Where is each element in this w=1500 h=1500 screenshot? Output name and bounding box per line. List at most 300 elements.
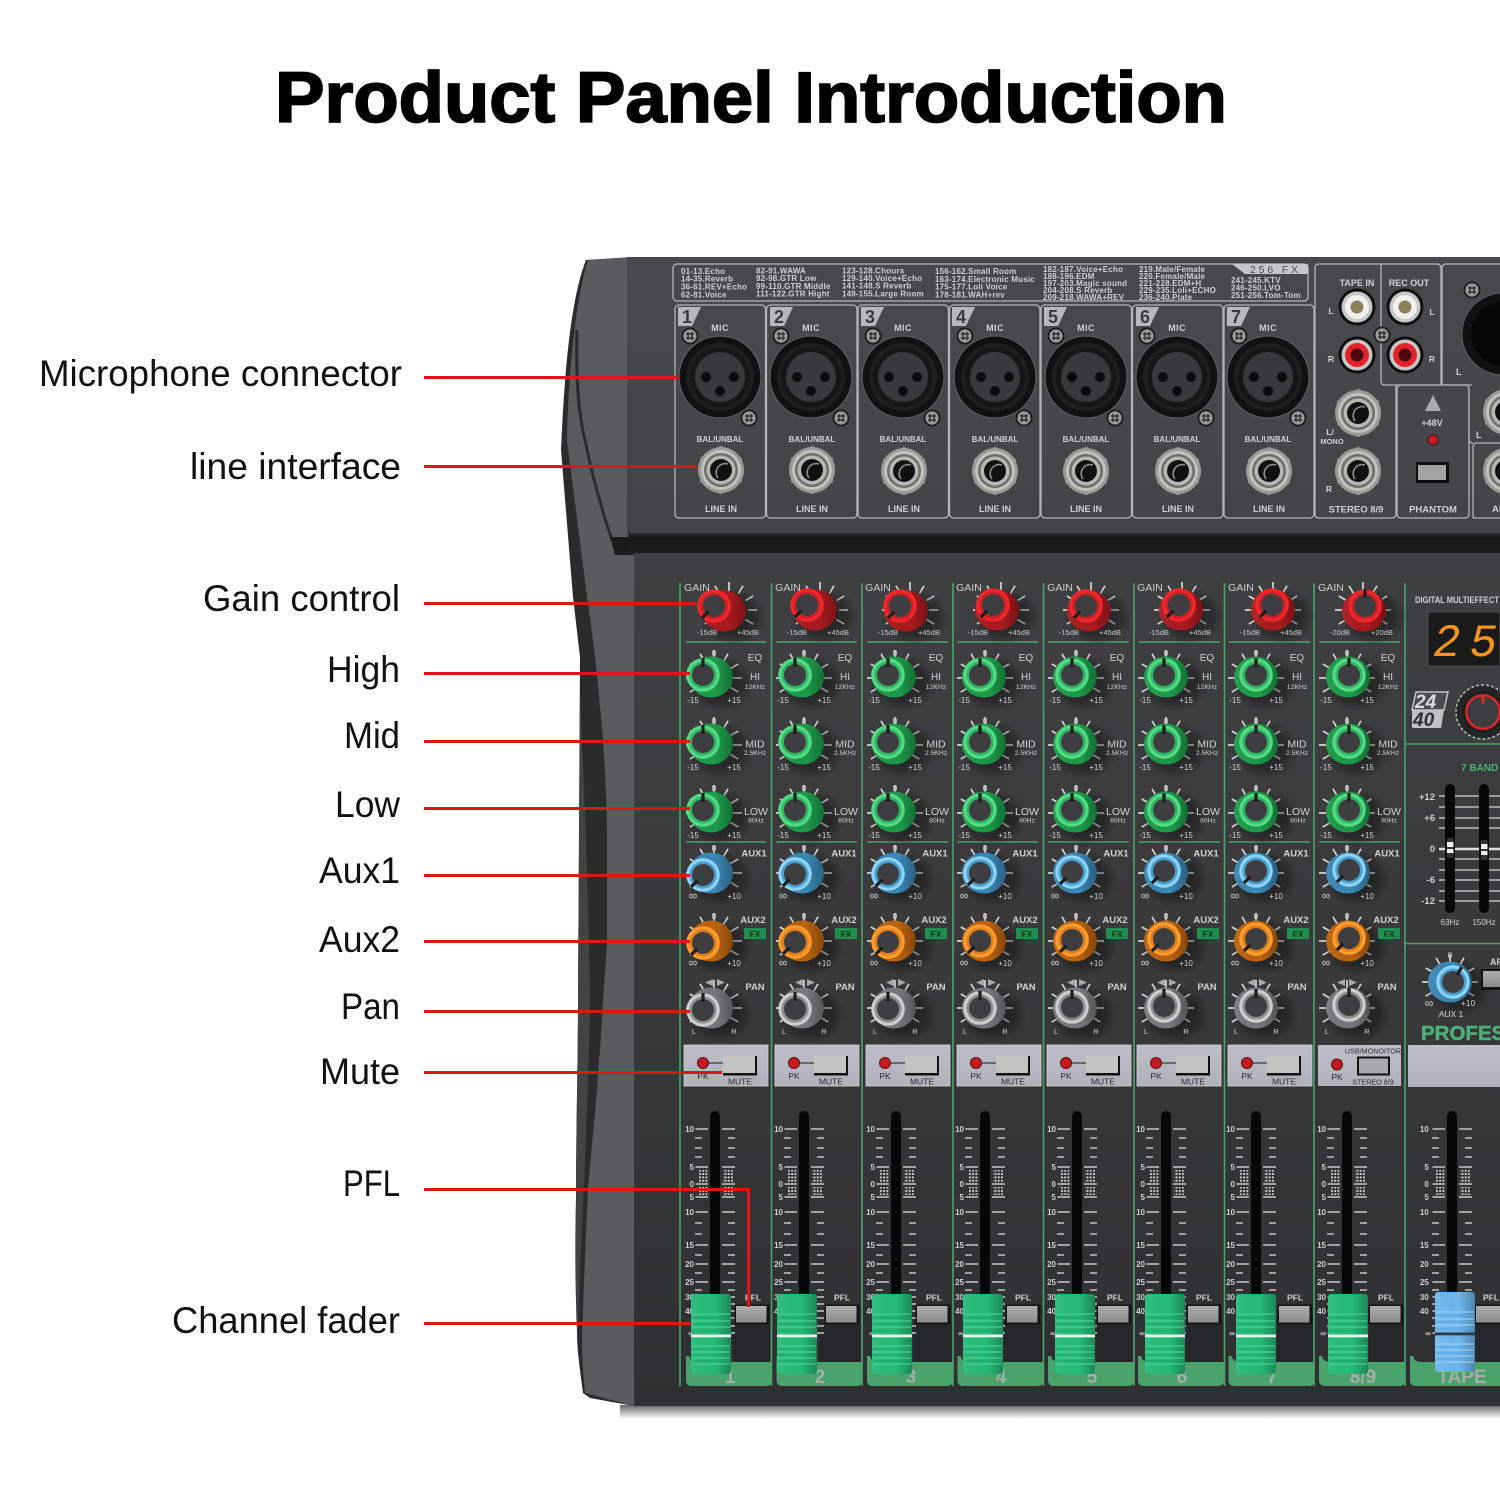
- fader bottom trays: 4: [996, 1367, 1007, 1388]
- fader scale numbers: 5: [1141, 1193, 1146, 1202]
- PAN labels: PAN: [1197, 982, 1217, 993]
- LOW EQ labels: 0: [1074, 783, 1079, 793]
- AUX2 labels and FX badges: ∞: [1141, 956, 1149, 970]
- gain labels: +45dB: [1189, 628, 1211, 637]
- fader bottom trays: 3: [906, 1367, 916, 1388]
- fader scale numbers: 10: [1420, 1208, 1429, 1217]
- AUX2 labels and FX badges: AUX2: [740, 915, 766, 926]
- MID EQ labels: 0: [1164, 716, 1169, 726]
- MIC labels: MIC: [1168, 323, 1186, 333]
- AUX1 labels: AUX1: [1283, 848, 1309, 860]
- HI EQ labels: -15: [1139, 696, 1151, 705]
- MID EQ labels: +15: [817, 763, 831, 772]
- HI EQ labels: 12KHz: [1287, 684, 1308, 691]
- input channel boxes 1-7: 1: [682, 307, 692, 327]
- callout: Low: Low: [335, 784, 400, 825]
- fader scale numbers: 25: [866, 1278, 876, 1287]
- PAN labels: PAN: [1016, 982, 1036, 993]
- fader bottom trays: 1: [725, 1367, 736, 1388]
- gain labels: -15dB: [1149, 628, 1169, 637]
- fader scale numbers: 40: [685, 1307, 695, 1316]
- LOW EQ labels: +15: [998, 831, 1012, 840]
- AUX1 labels: ∞: [1141, 888, 1149, 902]
- fader bottom trays: 6: [1177, 1367, 1187, 1388]
- MID EQ labels: 2.5KHz: [834, 750, 857, 757]
- dark recess beside faders: [733, 1322, 1500, 1362]
- LOW EQ labels: -15: [958, 831, 970, 840]
- 7 band stereo EQ: +12: [1419, 792, 1435, 803]
- LOW EQ labels: LOW: [1196, 806, 1220, 818]
- LOW EQ labels: -15: [1049, 831, 1061, 840]
- mute and PK blocks: PK: [1150, 1071, 1162, 1081]
- AUX2 labels and FX badges: ∞: [1051, 956, 1059, 970]
- AUX1 labels: ∞: [689, 888, 697, 902]
- front lip shadow band: [628, 533, 1500, 553]
- LOW EQ labels: 0: [1164, 783, 1169, 793]
- LOW EQ labels: LOW: [834, 806, 858, 818]
- fader scale numbers: ∞: [777, 1329, 783, 1338]
- AUX2 labels and FX badges: ∞: [870, 956, 878, 970]
- HI EQ labels: HI: [1202, 672, 1212, 683]
- mute and PK blocks: PK: [1241, 1071, 1253, 1081]
- AUX2 labels and FX badges: +10: [1179, 959, 1193, 968]
- AUX1 labels: +10: [1269, 892, 1283, 901]
- fader scale numbers: 5: [779, 1193, 784, 1202]
- input channel boxes 1-7: 4: [956, 307, 966, 327]
- fader scale numbers: 5: [960, 1193, 965, 1202]
- 24 bit 40 kHz badge: 24: [1414, 692, 1437, 713]
- AUX2 labels and FX badges: FX: [841, 929, 852, 939]
- MID EQ labels: +15: [998, 763, 1012, 772]
- AUX2 labels and FX badges: AUX2: [1193, 915, 1219, 926]
- 24 bit 40 kHz badge: 40: [1412, 710, 1435, 731]
- callout: Aux1: Aux1: [319, 850, 400, 891]
- MID EQ labels: MID: [1107, 738, 1127, 750]
- fader scale numbers: 30: [1047, 1293, 1057, 1302]
- AUX2 labels and FX badges: 0: [1164, 911, 1169, 921]
- stereo and RCA section: [1315, 264, 1441, 518]
- MID EQ labels: 0: [802, 716, 807, 726]
- fader scale numbers: ∞: [688, 1329, 694, 1338]
- AUX1 labels: +10: [1360, 892, 1374, 901]
- MID EQ labels: MID: [745, 738, 765, 750]
- HI EQ labels: EQ: [1381, 653, 1395, 664]
- AUX2 labels and FX badges: FX: [1112, 929, 1123, 939]
- title: Product Panel Introduction: [275, 59, 1227, 138]
- AUX1 labels: 0: [802, 843, 807, 853]
- HI EQ labels: [687, 648, 1399, 705]
- gain labels: GAIN: [1047, 582, 1073, 594]
- PFL buttons and labels: [734, 1292, 1500, 1324]
- AUX1 labels: +10: [817, 892, 831, 901]
- LOW EQ labels: LOW: [925, 806, 949, 818]
- AUX1 labels: [689, 843, 1400, 902]
- 7 band stereo EQ: 0: [1430, 844, 1435, 855]
- fader scale numbers: 15: [866, 1241, 876, 1250]
- gain labels: -15dB: [787, 628, 807, 637]
- master AUX 1 knob: ∞: [1425, 996, 1433, 1010]
- gain labels: GAIN: [1137, 582, 1163, 594]
- stereo and RCA section: R: [1328, 354, 1334, 364]
- MID EQ labels: 2.5KHz: [1196, 750, 1219, 757]
- HI EQ knob row: [686, 650, 1391, 712]
- MID EQ labels: MID: [926, 738, 946, 750]
- HI EQ labels: 0: [983, 648, 988, 658]
- HI EQ labels: HI: [1292, 672, 1302, 683]
- fader scale numbers: 0: [1141, 1180, 1146, 1189]
- AUX1 labels: +10: [1089, 892, 1103, 901]
- AUX1 labels: +10: [727, 892, 741, 901]
- HI EQ labels: 0: [802, 648, 807, 658]
- HI EQ labels: EQ: [929, 653, 943, 664]
- AUX1 labels: ∞: [960, 888, 968, 902]
- 256 FX preset list box: 182-187.Voice+Echo: [1043, 265, 1123, 274]
- 7 band stereo EQ: -6: [1427, 875, 1435, 886]
- fader scale numbers: 5: [960, 1163, 965, 1172]
- gain labels: -20dB: [1330, 628, 1350, 637]
- fader scale numbers: 5: [1424, 1163, 1429, 1172]
- program rotary encoder: [1456, 685, 1500, 739]
- fader scale numbers: 20: [1136, 1260, 1146, 1269]
- PAN labels: PAN: [926, 982, 946, 993]
- HI EQ labels: +15: [1360, 696, 1374, 705]
- BAL/UNBAL labels: BAL/UNBAL: [1063, 435, 1109, 444]
- mute and PK blocks: PK: [879, 1071, 891, 1081]
- lower control surface: [634, 553, 1500, 1406]
- MID EQ labels: -15: [1049, 763, 1061, 772]
- stereo 8/9 USB monitor switch: STEREO 8/9: [1352, 1078, 1394, 1086]
- AUX2 labels and FX badges: AUX2: [1102, 915, 1128, 926]
- 256 FX preset list box: 236-240.Plate: [1139, 293, 1193, 302]
- 256 FX preset list box: 149-155.Large Room: [842, 290, 924, 298]
- AUX1 labels: AUX1: [1103, 848, 1129, 860]
- fader scale numbers: 15: [1420, 1241, 1429, 1250]
- stereo and RCA section: REC OUT: [1389, 278, 1430, 288]
- AUX2 labels and FX badges: +10: [908, 959, 922, 968]
- MID EQ labels: -15: [958, 763, 970, 772]
- MIC labels: MIC: [894, 323, 912, 333]
- MIC labels: MIC: [1077, 323, 1095, 333]
- gain labels: GAIN: [1318, 582, 1344, 594]
- HI EQ labels: 12KHz: [1197, 684, 1218, 691]
- mute and PK blocks: MUTE: [728, 1076, 752, 1086]
- fader scale numbers: 5: [1322, 1193, 1327, 1202]
- stereo and RCA section: R: [1429, 354, 1435, 364]
- 256 FX preset list box: 62-81.Voice: [681, 290, 727, 300]
- LOW EQ labels: -15: [1320, 831, 1332, 840]
- fader scale numbers: 20: [685, 1260, 695, 1269]
- HI EQ labels: 0: [1074, 648, 1079, 658]
- MID EQ labels: 2.5KHz: [925, 750, 948, 757]
- HI EQ labels: HI: [750, 672, 760, 683]
- mute and PK blocks: MUTE: [1181, 1076, 1205, 1086]
- LINE IN labels: LINE IN: [1253, 504, 1285, 514]
- fader scale numbers: ∞: [1425, 1329, 1431, 1338]
- fader scale numbers: 20: [774, 1260, 784, 1269]
- fader scale numbers: 25: [1047, 1278, 1057, 1287]
- PAN labels: PAN: [1377, 982, 1397, 993]
- fader scale numbers: 10: [1420, 1125, 1429, 1134]
- gain labels: GAIN: [1228, 582, 1254, 594]
- AUX2 labels and FX badges: 0: [1074, 911, 1079, 921]
- gain labels: +45dB: [1280, 628, 1302, 637]
- blue master fader cap: [1435, 1292, 1475, 1372]
- fader scale numbers: 40: [1047, 1307, 1057, 1316]
- MID EQ labels: +15: [727, 763, 741, 772]
- fader bottom trays: 2: [815, 1367, 825, 1388]
- 256 FX preset list box: 82-91.WAWA: [756, 266, 806, 276]
- fader scale numbers: 10: [866, 1208, 876, 1217]
- gain labels: -15dB: [1240, 628, 1260, 637]
- fader scale numbers: 10: [1317, 1125, 1327, 1134]
- stereo and RCA section: TAPE IN: [1340, 278, 1374, 288]
- LOW EQ labels: +15: [727, 831, 741, 840]
- AUX1 labels: AUX1: [831, 848, 857, 860]
- MID EQ labels: 2.5KHz: [1106, 750, 1129, 757]
- AUX2 labels and FX badges: [689, 911, 1400, 970]
- LOW EQ labels: -15: [1229, 831, 1241, 840]
- HI EQ labels: HI: [931, 672, 941, 683]
- LOW EQ labels: 0: [1345, 783, 1350, 793]
- MID EQ labels: 0: [1254, 716, 1259, 726]
- mixer chassis left side: [561, 257, 1500, 1419]
- PFL buttons and labels: PFL: [926, 1292, 942, 1302]
- gain labels: -15dB: [1059, 628, 1079, 637]
- fader scale numbers: 10: [774, 1208, 784, 1217]
- input channel boxes 1-7: 2: [774, 307, 784, 327]
- HI EQ labels: HI: [1021, 672, 1031, 683]
- AUX1 labels: +10: [998, 892, 1012, 901]
- 256 FX preset list box: 129-140.Voice+Echo: [842, 274, 922, 283]
- stereo and RCA section: L: [1429, 307, 1435, 317]
- PAN labels: L: [873, 1027, 877, 1036]
- fader scale numbers: 5: [1231, 1163, 1236, 1172]
- 256 FX preset list box: 163-174.Electronic Music: [935, 275, 1035, 284]
- 256 FX preset list box: 221-228.EDM+H: [1139, 279, 1201, 288]
- callout: Mid: Mid: [344, 715, 400, 756]
- PAN labels: [692, 979, 1397, 1036]
- fader scale numbers: 25: [1226, 1278, 1236, 1287]
- LOW EQ labels: 0: [802, 783, 807, 793]
- fader scale numbers: 15: [1226, 1241, 1236, 1250]
- fader scale numbers: 5: [690, 1163, 695, 1172]
- AUX1 labels: AUX1: [1374, 848, 1400, 860]
- PFL buttons and labels: PFL: [745, 1292, 761, 1302]
- mute and PK blocks: PK: [697, 1071, 709, 1081]
- AUX1 labels: AUX1: [922, 848, 948, 860]
- LOW EQ labels: [687, 783, 1401, 840]
- PFL buttons and labels: PFL: [1378, 1292, 1394, 1302]
- line input jacks: [698, 446, 1292, 496]
- AUX2 labels and FX badges: 0: [983, 911, 988, 921]
- MID EQ labels: 0: [1074, 716, 1079, 726]
- MID EQ labels: 0: [712, 716, 717, 726]
- fader scale numbers: 20: [1317, 1260, 1327, 1269]
- fader scale numbers: 10: [955, 1208, 965, 1217]
- AUX2 labels and FX badges: 0: [802, 911, 807, 921]
- BAL/UNBAL labels: BAL/UNBAL: [972, 435, 1018, 444]
- mute and PK blocks: PK: [788, 1071, 800, 1081]
- MID EQ labels: -15: [868, 763, 880, 772]
- mute and PK blocks: PK: [970, 1071, 982, 1081]
- AUX2 labels and FX badges: 0: [712, 911, 717, 921]
- stereo and RCA section: R: [1326, 484, 1332, 494]
- PAN labels: L: [782, 1027, 786, 1036]
- LOW EQ labels: LOW: [1106, 806, 1130, 818]
- HI EQ labels: 12KHz: [1016, 684, 1037, 691]
- MID EQ labels: 0: [1345, 716, 1350, 726]
- fader scale numbers: 40: [774, 1307, 784, 1316]
- LINE IN labels: LINE IN: [888, 504, 920, 514]
- HI EQ labels: 0: [712, 648, 717, 658]
- AUX2 labels and FX badges: FX: [1384, 929, 1395, 939]
- MID EQ labels: -15: [687, 763, 699, 772]
- fader scale numbers: 5: [871, 1193, 876, 1202]
- fader scale numbers: 10: [1136, 1208, 1146, 1217]
- input channel boxes 1-7: [675, 305, 1314, 518]
- AUX2 labels and FX badges: +10: [998, 959, 1012, 968]
- gain labels: GAIN: [956, 582, 982, 594]
- mute and PK blocks: MUTE: [910, 1076, 934, 1086]
- PAN labels: L: [1325, 1027, 1329, 1036]
- HI EQ labels: +15: [1179, 696, 1193, 705]
- fader scale numbers: 10: [955, 1125, 965, 1134]
- fader scale numbers: 30: [866, 1293, 876, 1302]
- LOW EQ labels: LOW: [1015, 806, 1039, 818]
- MID EQ labels: 0: [983, 716, 988, 726]
- LOW EQ labels: 80Hz: [1110, 818, 1127, 824]
- mute and PK blocks: MUTE: [819, 1076, 843, 1086]
- AUX1 labels: 0: [983, 843, 988, 853]
- HI EQ labels: 0: [1254, 648, 1259, 658]
- fader scale numbers: 20: [955, 1260, 965, 1269]
- fader scale numbers: 25: [774, 1278, 784, 1287]
- main output connectors cut off at right edge: [1442, 264, 1500, 518]
- 256 FX preset list box: 204-208.S Reverb: [1043, 286, 1112, 295]
- fader scale numbers: 30: [955, 1293, 965, 1302]
- fader scale numbers: 10: [1317, 1208, 1327, 1217]
- gain labels: +45dB: [1008, 628, 1030, 637]
- 256 FX preset list box: 219.Male/Female: [1139, 265, 1205, 274]
- HI EQ labels: EQ: [1110, 653, 1124, 664]
- fader scale numbers: 20: [1226, 1260, 1236, 1269]
- 256 FX preset list box: 229-235.Loli+ECHO: [1139, 286, 1216, 295]
- LOW EQ labels: 0: [1254, 783, 1259, 793]
- gain labels: +45dB: [1099, 628, 1121, 637]
- PAN labels: R: [1002, 1027, 1008, 1036]
- MID EQ labels: MID: [1378, 738, 1398, 750]
- MID EQ knob row: [686, 717, 1391, 779]
- MID EQ labels: MID: [1016, 738, 1036, 750]
- fader scale numbers: 10: [685, 1208, 695, 1217]
- LOW EQ labels: 80Hz: [929, 818, 946, 824]
- LOW EQ labels: +15: [1179, 831, 1193, 840]
- 256 FX preset list box: 209-218.WAWA+REV: [1043, 293, 1125, 302]
- 256 FX preset list box: 178-181.WAH+rev: [935, 290, 1005, 300]
- AUX2 labels and FX badges: 0: [1254, 911, 1259, 921]
- AUX1 labels: +10: [1179, 892, 1193, 901]
- fader scale numbers: 30: [685, 1293, 695, 1302]
- digital multieffect display: [1415, 595, 1500, 670]
- 256 FX preset list box: 01-13.Echo: [681, 267, 725, 276]
- stereo and RCA section: STEREO 8/9: [1329, 504, 1383, 516]
- fader scale numbers: 10: [1136, 1125, 1146, 1134]
- 256 FX preset list box: [673, 264, 1308, 302]
- main output connectors cut off at right edge: L: [1476, 430, 1482, 440]
- 256 FX preset list box: 36-61.REV+Echo: [681, 282, 747, 292]
- phantom power section: PHANTOM: [1409, 504, 1457, 516]
- AUX2 labels and FX badges: AUX2: [921, 915, 947, 926]
- PAN labels: R: [1364, 1027, 1370, 1036]
- AUX2 labels and FX badges: FX: [1203, 929, 1214, 939]
- HI EQ labels: EQ: [1200, 653, 1214, 664]
- MID EQ labels: [687, 716, 1400, 772]
- fader scale numbers: 25: [685, 1278, 695, 1287]
- MIC labels: MIC: [802, 323, 820, 333]
- BAL/UNBAL labels: BAL/UNBAL: [789, 435, 835, 444]
- fader scale numbers: 10: [1226, 1125, 1236, 1134]
- PAN labels: L: [1144, 1027, 1148, 1036]
- fader scale numbers: 15: [685, 1241, 695, 1250]
- fader scale numbers: 5: [1322, 1163, 1327, 1172]
- AUX2 labels and FX badges: +10: [1089, 959, 1103, 968]
- BAL/UNBAL labels: BAL/UNBAL: [697, 435, 743, 444]
- LOW EQ labels: 80Hz: [1290, 818, 1307, 824]
- fader scale numbers: 0: [1052, 1180, 1057, 1189]
- AUX2 labels and FX badges: ∞: [1231, 956, 1239, 970]
- 256 FX preset list box: 156-162.Small Room: [935, 267, 1016, 276]
- LOW EQ labels: 0: [712, 783, 717, 793]
- 24 bit 40 kHz badge: [1412, 692, 1448, 731]
- fader scale numbers: 0: [960, 1180, 965, 1189]
- fader scale numbers: ∞: [1050, 1329, 1056, 1338]
- AUX1 labels: ∞: [1231, 888, 1239, 902]
- stereo and RCA section: L/: [1326, 427, 1334, 437]
- fader scale numbers: ∞: [1320, 1329, 1326, 1338]
- AUX2 labels and FX badges: ∞: [779, 956, 787, 970]
- PAN labels: R: [821, 1027, 827, 1036]
- MIC labels: MIC: [1259, 323, 1277, 333]
- fader scale numbers: 15: [774, 1241, 784, 1250]
- BAL/UNBAL labels: BAL/UNBAL: [1245, 435, 1291, 444]
- HI EQ labels: 0: [1164, 648, 1169, 658]
- MID EQ labels: MID: [835, 738, 855, 750]
- AUX1 labels: 0: [893, 843, 898, 853]
- gain labels: +20dB: [1371, 628, 1393, 637]
- PAN labels: R: [731, 1027, 737, 1036]
- 256 FX preset list box: 175-177.Loli Voice: [935, 282, 1008, 292]
- PAN labels: L: [692, 1027, 696, 1036]
- PAN labels: PAN: [1287, 982, 1307, 993]
- PAN labels: L: [963, 1027, 967, 1036]
- fader scale numbers: ∞: [869, 1329, 875, 1338]
- fader scale numbers: 30: [1226, 1293, 1236, 1302]
- AUX1 labels: ∞: [1322, 888, 1330, 902]
- LOW EQ labels: 80Hz: [1200, 818, 1217, 824]
- phantom power section: [1397, 385, 1469, 518]
- AUX2 knob row: [686, 913, 1391, 976]
- 256 FX preset list box: 92-98.GTR Low: [756, 274, 817, 283]
- fader scale numbers: 5: [1141, 1163, 1146, 1172]
- AUX2 labels and FX badges: AUX2: [1373, 915, 1399, 926]
- HI EQ labels: -15: [687, 696, 699, 705]
- MID EQ labels: 2.5KHz: [744, 750, 767, 757]
- HI EQ labels: 0: [893, 648, 898, 658]
- LINE IN labels: LINE IN: [1070, 504, 1102, 514]
- LINE IN labels: LINE IN: [1162, 504, 1194, 514]
- callout: High: High: [327, 649, 400, 690]
- fader scale numbers: 30: [774, 1293, 784, 1302]
